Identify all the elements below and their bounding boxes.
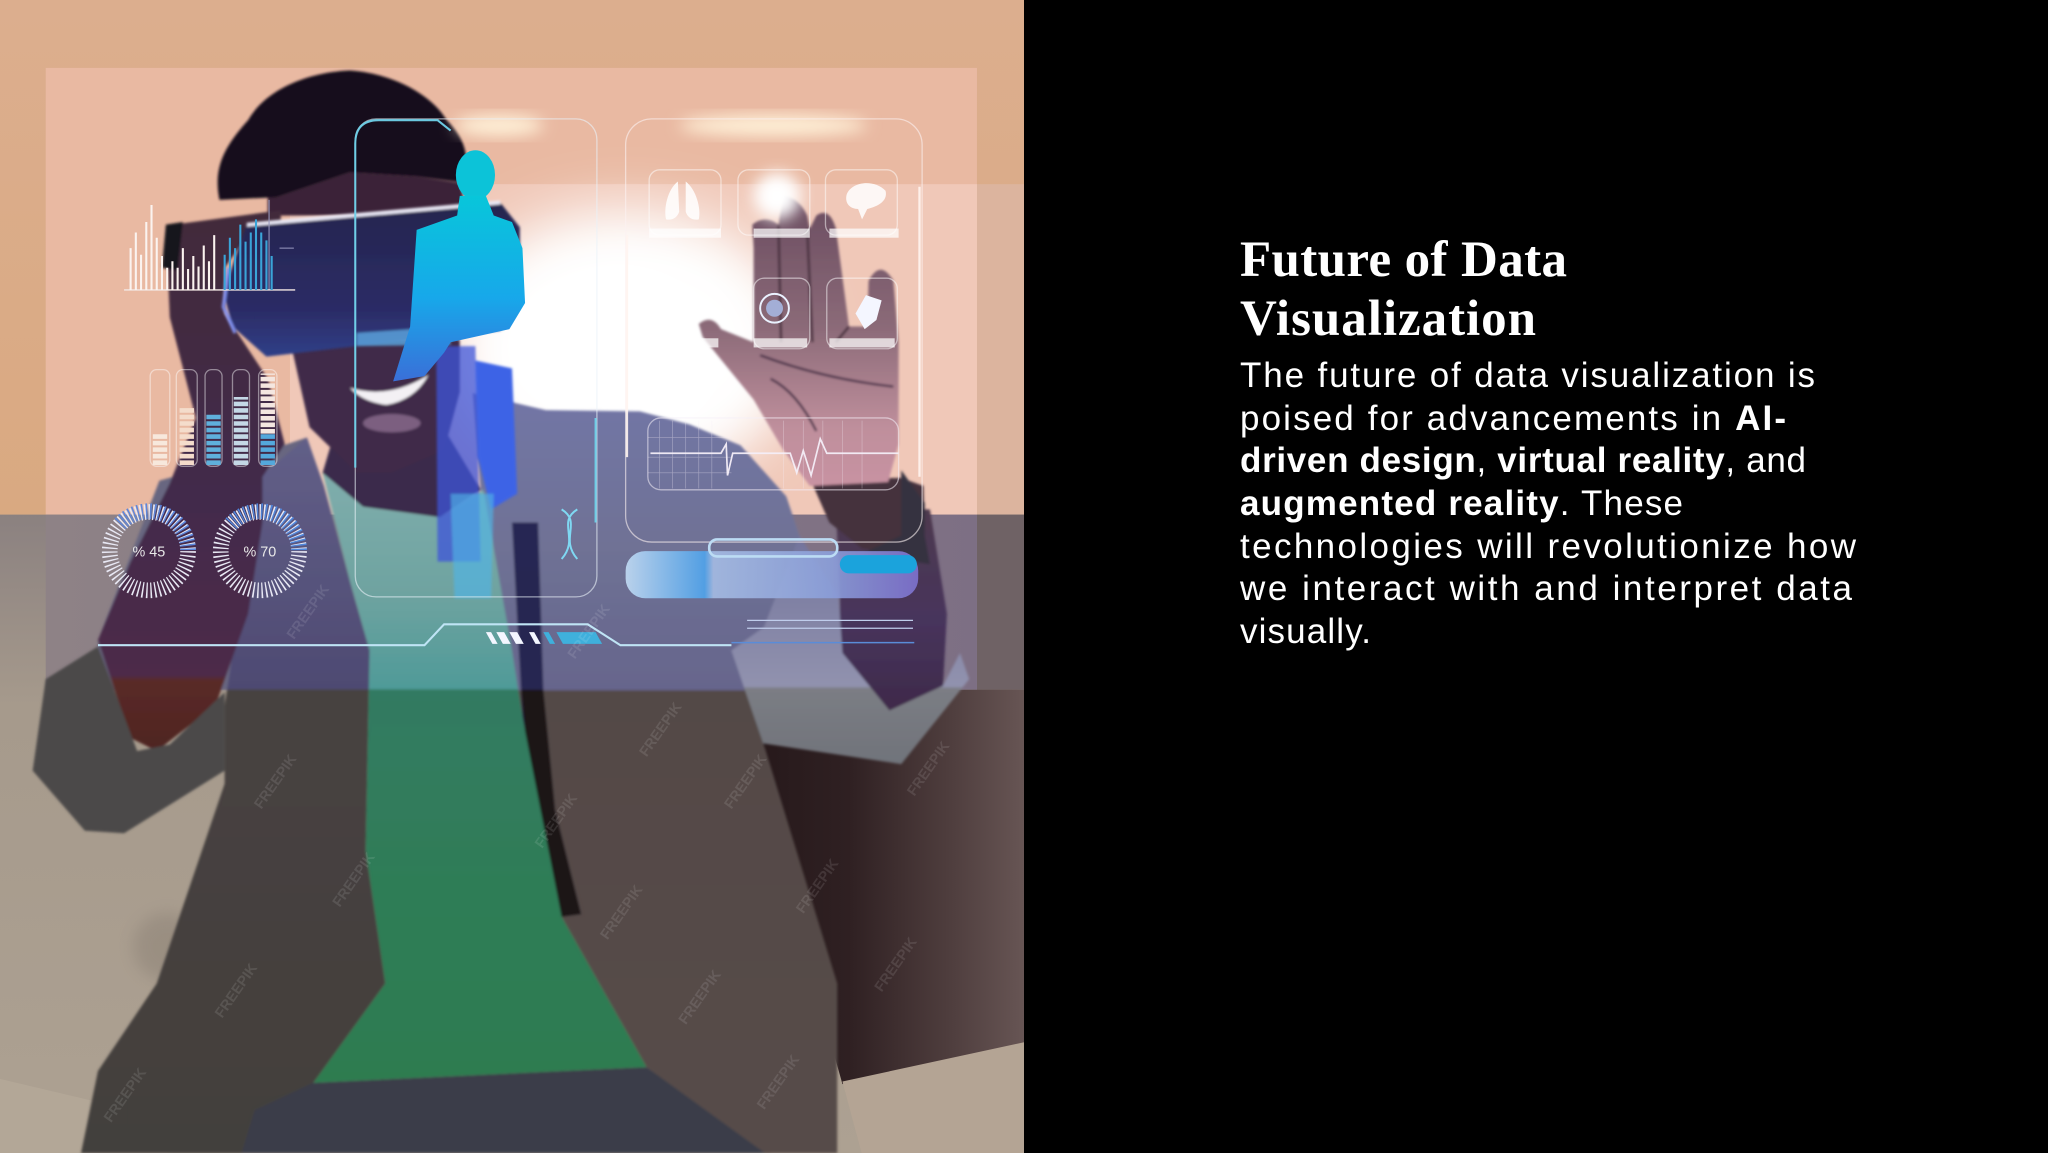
bottom interface rail <box>98 620 914 645</box>
room background: wall and sofa <box>0 0 1024 1153</box>
title <box>1240 232 1567 347</box>
body text block: technologies will revolutionize how <box>1240 527 1857 566</box>
hologram frame: medical dashboard <box>626 119 922 542</box>
image watermarks: FREEPIK <box>330 849 379 910</box>
trousers <box>240 1066 766 1153</box>
body text block: we interact with and interpret data <box>1239 569 1853 608</box>
image watermarks: FREEPIK <box>565 601 614 662</box>
image watermarks: FREEPIK <box>722 751 771 812</box>
ECG chart <box>648 418 899 490</box>
body text block: driven design, virtual reality, and <box>1240 441 1806 480</box>
image watermarks <box>101 582 954 1126</box>
left jacket panel <box>81 438 385 1153</box>
radial gauge: 70 percent <box>221 511 299 590</box>
icon: DNA helix <box>562 509 577 559</box>
cyan human body hologram <box>393 150 525 381</box>
radial gauge: 45 percent: % 45 <box>133 544 165 560</box>
left sleeve <box>33 647 225 833</box>
icon: brain <box>846 183 886 219</box>
right jacket panel <box>473 393 837 1153</box>
icon: lungs <box>665 182 699 220</box>
image watermarks: FREEPIK <box>676 967 725 1028</box>
pale frame edges <box>627 187 920 477</box>
body text block: poised for advancements in AI- <box>1240 399 1786 438</box>
tile label bars <box>649 229 899 347</box>
raised right hand <box>699 196 899 486</box>
VR headset <box>223 202 520 357</box>
body text block: augmented reality. These <box>1240 484 1683 523</box>
image watermarks: FREEPIK <box>793 856 843 917</box>
bright frame edges <box>355 120 596 522</box>
right sleeve <box>712 536 969 764</box>
hair <box>218 71 467 200</box>
image watermarks: FREEPIK <box>872 934 921 995</box>
image watermarks: FREEPIK <box>251 751 301 812</box>
title: Visualization <box>1240 291 1536 347</box>
person <box>33 71 969 1153</box>
body text block <box>1239 356 1857 651</box>
photo: man wearing a VR headset with holographic interface <box>0 0 1024 1153</box>
image watermarks: FREEPIK <box>532 791 581 851</box>
face below headset <box>292 340 462 448</box>
level tube gauges <box>150 370 277 466</box>
translucent holographic panel <box>46 68 977 690</box>
right wrist <box>810 478 925 555</box>
right forearm <box>836 509 947 731</box>
icon: glowing fingertip <box>754 172 801 219</box>
radial gauge: 70 percent: % 70 <box>244 544 276 560</box>
icon: white glove <box>856 295 882 329</box>
image watermarks: FREEPIK <box>212 960 261 1021</box>
body text block: The future of data visualization is <box>1240 356 1815 395</box>
spectrum bar chart <box>124 205 295 290</box>
body text block: visually. <box>1240 612 1371 651</box>
forehead <box>268 172 468 216</box>
shirt <box>313 473 647 1083</box>
image watermarks: FREEPIK <box>284 582 333 642</box>
title: Future of Data <box>1240 232 1567 288</box>
icon tiles <box>649 170 897 349</box>
image watermarks: FREEPIK <box>904 738 954 799</box>
hologram frame: body scan <box>355 119 597 597</box>
image watermarks: FREEPIK <box>101 1065 150 1126</box>
image watermarks: FREEPIK <box>754 1052 803 1112</box>
image watermarks: FREEPIK <box>598 882 647 943</box>
neck <box>321 436 482 518</box>
progress pill control <box>626 539 918 598</box>
icon: ring target <box>760 294 789 323</box>
image watermarks: FREEPIK <box>637 699 686 760</box>
chart axis on headset <box>269 200 294 290</box>
radial gauge: 45 percent <box>110 511 188 590</box>
blue hologram columns <box>436 346 517 598</box>
watch band <box>862 470 930 564</box>
raised forearm and hand <box>98 210 285 751</box>
dark shadow beside shirt <box>511 521 544 726</box>
wrist strap <box>162 222 183 270</box>
left shoulder <box>98 438 327 690</box>
glow spots at top of the frames <box>455 115 867 136</box>
